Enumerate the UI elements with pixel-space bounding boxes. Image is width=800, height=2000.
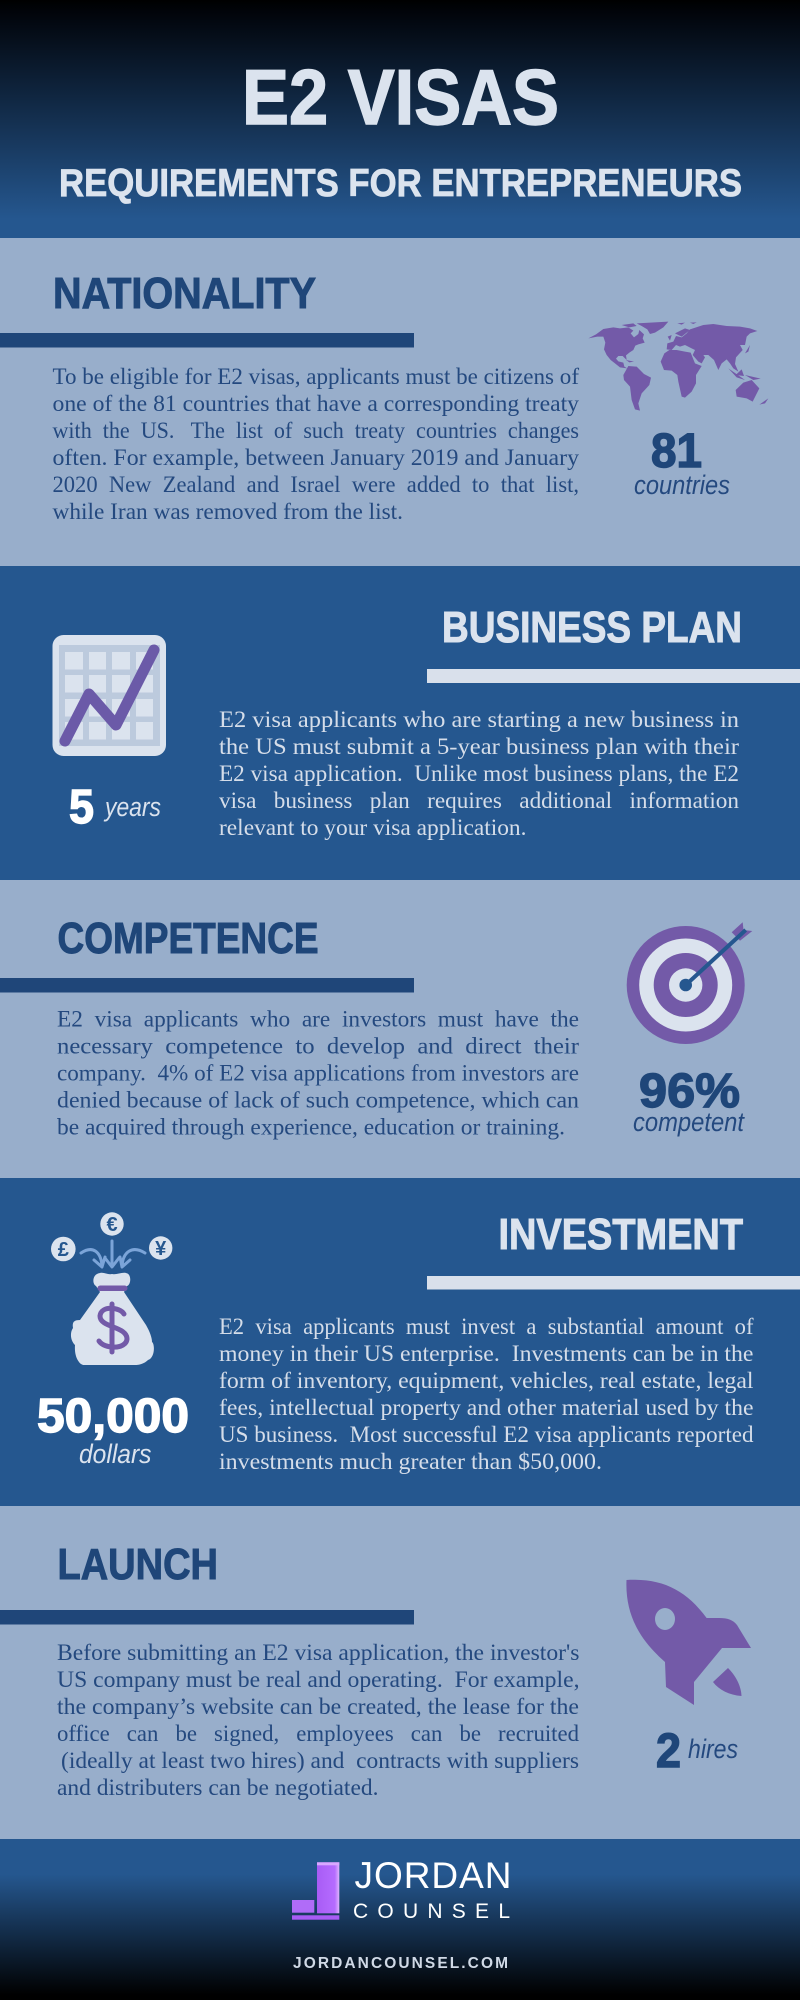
body text: the US must submit a 5-year business plan with their [219, 734, 739, 760]
body text: To be eligible for E2 visas, applicants must be citizens of [52, 364, 579, 390]
heading: nationality: NATIONALITY [53, 269, 316, 318]
body text: often. For example, between January 2019 and January [52, 445, 579, 471]
stat: 50,000 dollars: dollars [79, 1439, 152, 1469]
panel: business plan [0, 566, 800, 880]
logo mark [292, 1862, 339, 1920]
heading bar [427, 1276, 800, 1290]
stat: 81 countries: countries [634, 470, 730, 500]
heading bar [0, 333, 414, 348]
website url: JORDANCOUNSEL.COM [293, 1955, 508, 1972]
stat: 81 countries [634, 425, 730, 500]
stat: 50,000 dollars [37, 1390, 189, 1469]
panel: launch [0, 1506, 800, 1839]
icon: target with arrow [627, 922, 752, 1044]
body text: office can be signed, employees can be recruited [57, 1721, 579, 1747]
body text: US business. Most successful E2 visa applicants reported [219, 1422, 754, 1448]
header banner [0, 0, 800, 238]
body text: E2 visa applicants must invest a substantial amount of [219, 1314, 754, 1340]
icon: world map [588, 322, 768, 411]
heading: investment: INVESTMENT [498, 1210, 743, 1259]
stat: 5 years [69, 781, 161, 834]
body text: fees, intellectual property and other material used by the [219, 1395, 754, 1421]
body text: denied because of lack of such competence, which can [57, 1088, 579, 1114]
body text [52, 364, 579, 525]
stat: 96% competent: competent [633, 1107, 745, 1137]
body text [57, 1006, 579, 1140]
wordmark: Jordan Counsel: COUNSEL [353, 1900, 510, 1923]
body text: company. 4% of E2 visa applications from investors are [57, 1060, 579, 1086]
heading bar [0, 978, 414, 992]
body text: (ideally at least two hires) and contracts with suppliers [61, 1748, 579, 1774]
body text: and distributers can be negotiated. [57, 1775, 378, 1801]
heading bar [0, 1610, 414, 1624]
heading: competence: COMPETENCE [58, 914, 318, 963]
title: E2 VISAS [242, 53, 559, 141]
icon: money bag with currency coins: £ [58, 1239, 69, 1261]
body text: relevant to your visa application. [219, 815, 526, 841]
body text: visa business plan requires additional information [219, 788, 739, 814]
icon: money bag with currency coins: € [106, 1214, 118, 1236]
stat: 2 hires [656, 1725, 738, 1778]
icon: rocket [626, 1580, 751, 1705]
panel: nationality [0, 238, 800, 566]
heading: business plan: BUSINESS PLAN [442, 603, 742, 652]
body text: the company’s website can be created, the lease for the [57, 1694, 579, 1720]
wordmark: Jordan Counsel: JORDAN [354, 1855, 512, 1896]
icon: growth chart [52, 635, 166, 756]
body text [219, 707, 739, 841]
heading bar [427, 669, 800, 683]
body text: one of the 81 countries that have a corresponding treaty [52, 391, 579, 417]
panel: competence [0, 880, 800, 1178]
icon: money bag with currency coins: ¥ [155, 1238, 167, 1260]
body text: form of inventory, equipment, vehicles, real estate, legal [219, 1368, 754, 1394]
body text: money in their US enterprise. Investments can be in the [219, 1341, 754, 1367]
body text: US company must be real and operating. For example, [57, 1667, 580, 1693]
stat: 2 hires: hires [688, 1734, 738, 1764]
body text: while Iran was removed from the list. [52, 499, 403, 525]
panel: investment [0, 1178, 800, 1506]
icon: money bag with currency coins [51, 1212, 172, 1365]
body text: E2 visa applicants who are investors must have the [57, 1006, 579, 1032]
body text: Before submitting an E2 visa application, the investor's [57, 1640, 580, 1666]
stat: 5 years: years [103, 792, 161, 822]
body text: necessary competence to develop and direct their [57, 1034, 579, 1060]
body text: investments much greater than $50,000. [219, 1449, 602, 1475]
stat: 96% competent [633, 1065, 745, 1137]
body text: be acquired through experience, education or training. [57, 1114, 565, 1140]
stat: 2 hires: 2 [656, 1725, 681, 1778]
body text: E2 visa applicants who are starting a new business in [219, 707, 739, 733]
body text: E2 visa application. Unlike most business plans, the E2 [219, 761, 739, 787]
body text [57, 1640, 580, 1801]
stat: 81 countries: 81 [651, 425, 702, 478]
body text: 2020 New Zealand and Israel were added to that list, [52, 472, 579, 498]
body text: with the US. The list of such treaty countries changes [52, 418, 579, 444]
stat: 5 years: 5 [69, 781, 94, 834]
heading: launch: LAUNCH [58, 1540, 218, 1589]
body text [219, 1314, 754, 1475]
stat: 50,000 dollars: 50,000 [37, 1390, 189, 1443]
footer banner [0, 1839, 800, 2000]
stat: 96% competent: 96% [639, 1065, 740, 1118]
wordmark: Jordan Counsel [353, 1855, 512, 1923]
